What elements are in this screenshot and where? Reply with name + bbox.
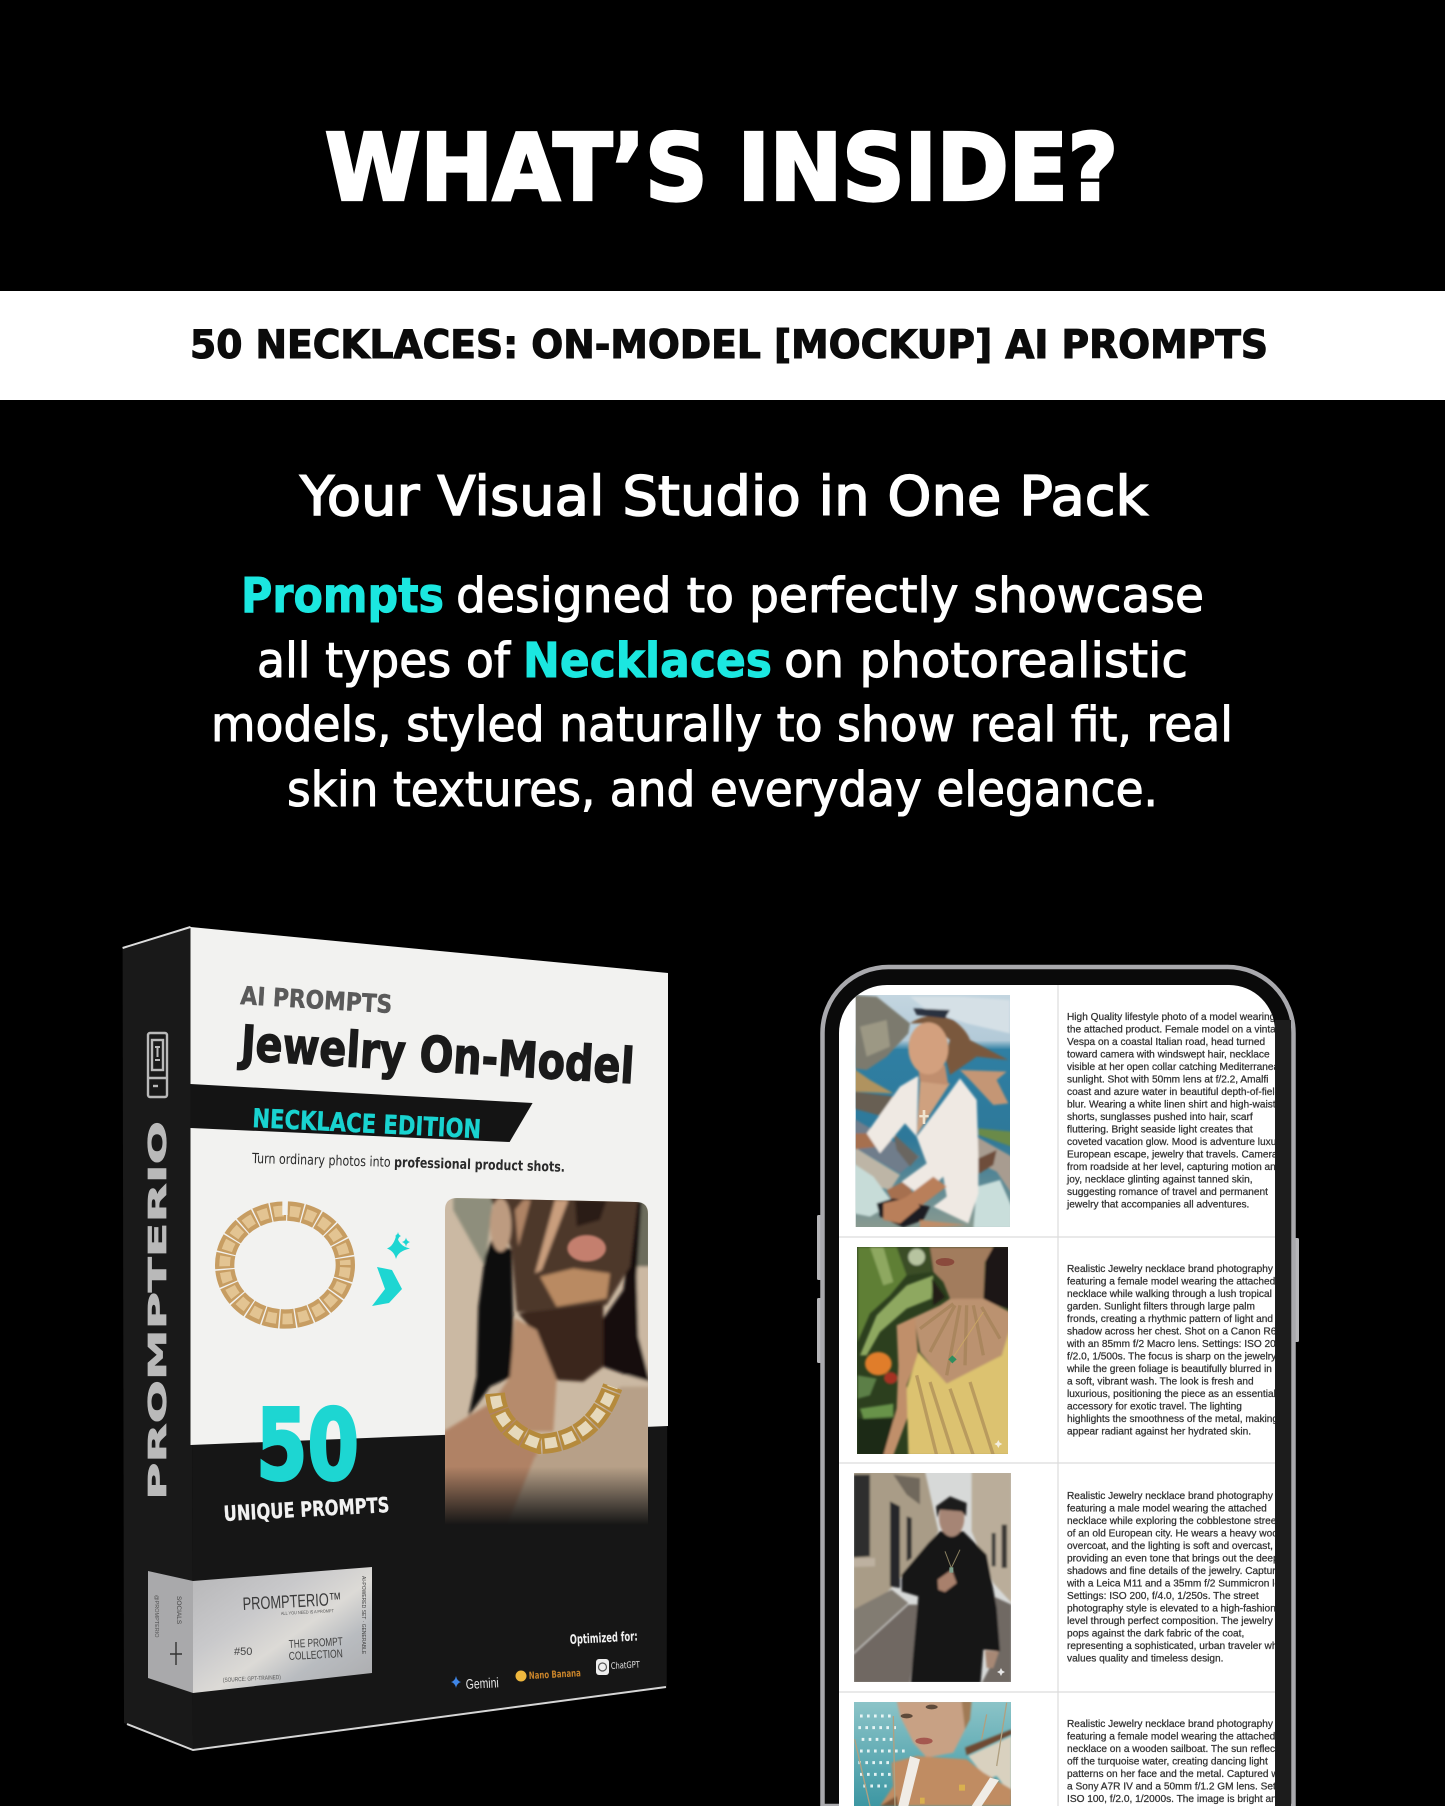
prompt text 3: Realistic Jewelry necklace brand photography xyxy=(1067,1491,1274,1502)
prompt text 1: High Quality lifestyle photo of a model wearing xyxy=(1067,1012,1275,1023)
prompt text 2: a soft, vibrant wash. The look is fresh and xyxy=(1067,1376,1254,1388)
description paragraph: Prompts xyxy=(241,568,444,624)
prompt text 2: accessory for exotic travel. The lighting xyxy=(1067,1402,1242,1412)
prompt text 3 xyxy=(1066,1491,1294,1664)
table dividers xyxy=(839,985,1275,1806)
prompt text 1: Vespa on a coastal Italian road, head turned xyxy=(1067,1037,1265,1048)
prompt text 4: ISO 100, f/2.0, 1/2000s. The image is bright and xyxy=(1067,1794,1282,1805)
nano banana badge: Nano Banana xyxy=(529,1668,581,1682)
prompt text 3: level through perfect composition. The jewelry xyxy=(1067,1616,1274,1627)
chatgpt badge: ChatGPT xyxy=(611,1660,640,1672)
phone side buttons xyxy=(817,1215,1299,1363)
necklace illustration xyxy=(225,1198,345,1319)
prompt text 3: overcoat, and the lighting is soft and overcast, xyxy=(1067,1541,1273,1552)
prompt text 4: necklace on a wooden sailboat. The sun reflects xyxy=(1067,1744,1283,1755)
phone screen xyxy=(839,985,1300,1806)
prompt text 2: fronds, creating a rhythmic pattern of light and xyxy=(1067,1314,1273,1325)
nano banana badge xyxy=(516,1668,581,1682)
prompt text 4 xyxy=(1067,1719,1275,1804)
description paragraph: on photorealistic xyxy=(784,633,1188,689)
label collection text xyxy=(289,1636,343,1663)
phone mockup xyxy=(817,967,1300,1806)
silver collection label: AI-POWERED SET · GENERABLE xyxy=(360,1576,366,1655)
product box xyxy=(123,927,668,1750)
silver collection label: (SOURCE: GPT-TRAINED) xyxy=(223,1675,281,1684)
photo: man in european street xyxy=(853,1471,1012,1683)
prompt text 2: featuring a female model wearing the attached xyxy=(1067,1276,1275,1288)
prompt text 3: representing a sophisticated, urban traveler who xyxy=(1067,1641,1283,1652)
prompt text 3: with a Leica M11 and a 35mm f/2 Summicron lens. xyxy=(1066,1578,1294,1590)
prompt text 1: toward camera with windswept hair, necklace xyxy=(1067,1050,1270,1060)
photo: model on vespa xyxy=(853,993,1012,1228)
tagline: Turn ordinary photos into professional product shots. xyxy=(251,1151,565,1176)
arrow icon xyxy=(372,1267,402,1306)
prompt text 1 xyxy=(1066,1012,1287,1210)
box front panel xyxy=(190,927,668,1750)
prompt text 2: while the green foliage is beautifully blurred in xyxy=(1066,1364,1272,1375)
count: 50: 50 xyxy=(256,1389,359,1503)
prompt text 2: f/2.0, 1/500s. The focus is sharp on the jewelry, xyxy=(1067,1352,1278,1362)
prompt text 4: a Sony A7R IV and a 50mm f/1.2 GM lens. Settings: xyxy=(1067,1782,1300,1792)
prompt text 4: featuring a female model wearing the attached xyxy=(1067,1732,1275,1742)
optimized for section xyxy=(451,1629,640,1692)
prompt text 1: coast and azure water in beautiful depth-of-field xyxy=(1067,1087,1280,1098)
silver collection label: SOCIALS xyxy=(175,1596,182,1625)
edition ribbon xyxy=(190,1084,533,1142)
edition name: NECKLACE EDITION xyxy=(252,1104,482,1145)
prompt text 1: sunlight. Shot with 50mm lens at f/2.2, Amalfi xyxy=(1067,1074,1268,1086)
prompt text 2: appear radiant against her hydrated skin. xyxy=(1067,1426,1251,1438)
label collection text: COLLECTION xyxy=(289,1648,343,1663)
prompt text 4: Realistic Jewelry necklace brand photography xyxy=(1067,1719,1274,1730)
prompt text 2: with an 85mm f/2 Macro lens. Settings: ISO 200, xyxy=(1066,1339,1284,1350)
gemini badge: Gemini xyxy=(465,1674,499,1692)
prompt text 3: necklace while exploring the cobblestone streets xyxy=(1067,1516,1284,1527)
right bezel xyxy=(1275,1020,1291,1806)
heading: your visual studio: Your Visual Studio in One Pack xyxy=(299,465,1149,528)
palm shadow stripes xyxy=(917,1304,1000,1455)
prompt text 1: shorts, sunglasses pushed into hair, scarf xyxy=(1067,1112,1253,1123)
prompt text 2: luxurious, positioning the piece as an essential xyxy=(1067,1389,1276,1400)
necklace on model xyxy=(495,1387,613,1444)
subtitle text: 50 NECKLACES: ON-MODEL [MOCKUP] AI PROMPTS xyxy=(190,323,1268,368)
label collection text: THE PROMPT xyxy=(289,1636,343,1651)
prompt text 3: values quality and timeless design. xyxy=(1067,1654,1223,1664)
phone body xyxy=(822,967,1294,1806)
silver collection label: ALL YOU NEED IS A PROMPT xyxy=(281,1608,334,1616)
model photo xyxy=(443,1197,652,1535)
prompt text 1: coveted vacation glow. Mood is adventure luxury, xyxy=(1067,1137,1287,1148)
spine brand name: PROMPTERIO xyxy=(143,1121,172,1500)
description paragraph: designed to perfectly showcase xyxy=(456,568,1204,624)
prompt text 1: fluttering. Bright seaside light creates that xyxy=(1067,1124,1253,1136)
photo: model in tropical garden xyxy=(855,1245,1010,1455)
box bottom edge xyxy=(127,1687,666,1750)
prompt text 1: the attached product. Female model on a vintage xyxy=(1067,1024,1287,1036)
product title: Jewelry On-Model xyxy=(237,1015,636,1095)
description paragraph: models, styled naturally to show real fit, real xyxy=(211,697,1233,753)
prompt text 2: necklace while walking through a lush tropical xyxy=(1067,1289,1272,1300)
description paragraph: skin textures, and everyday elegance. xyxy=(287,762,1158,818)
prompt text 4: patterns on her face and the metal. Captured with xyxy=(1067,1769,1289,1780)
water sparkles xyxy=(858,1716,907,1786)
subtitle band xyxy=(0,291,1445,400)
prompt text 1: from roadside at her level, capturing motion and xyxy=(1067,1162,1281,1173)
prompt text 2: garden. Sunlight filters through large palm xyxy=(1067,1302,1255,1312)
description paragraph xyxy=(211,568,1233,818)
description paragraph: all types of xyxy=(257,633,511,689)
prompt text 1: European escape, jewelry that travels. Camera xyxy=(1067,1150,1278,1160)
prompt text 3: shadows and fine details of the jewelry. Captured xyxy=(1067,1566,1287,1577)
box spine xyxy=(123,927,193,1750)
prompt text 3: photography style is elevated to a high-fashion xyxy=(1067,1604,1276,1614)
prompt text 3: featuring a male model wearing the attached xyxy=(1067,1504,1267,1514)
prompt text 2: Realistic Jewelry necklace brand photography xyxy=(1067,1264,1274,1275)
prompt text 4: off the turquoise water, creating dancing light xyxy=(1067,1756,1268,1768)
silver collection label: #50 xyxy=(234,1646,252,1658)
title: WHAT’S INSIDE? xyxy=(325,114,1118,222)
photo: model on sailboat xyxy=(853,1701,1012,1806)
prompt text 3: of an old European city. He wears a heavy wool xyxy=(1067,1528,1280,1540)
sparkle icon xyxy=(387,1232,410,1259)
silver collection label: @PROMPTERIO xyxy=(153,1595,159,1638)
count label: UNIQUE PROMPTS xyxy=(223,1493,390,1526)
prompt text 2 xyxy=(1066,1264,1285,1438)
prompt text 3: pops against the dark fabric of the coat, xyxy=(1067,1628,1244,1640)
gemini badge xyxy=(451,1674,499,1692)
prompt text 2: shadow across her chest. Shot on a Canon R6 II xyxy=(1067,1326,1285,1338)
description paragraph: Necklaces xyxy=(523,633,772,689)
silver collection label xyxy=(148,1567,372,1693)
prompt text 2: highlights the smoothness of the metal, making xyxy=(1067,1414,1278,1425)
label: AI prompts: AI PROMPTS xyxy=(240,981,393,1019)
prompt text 3: providing an even tone that brings out the deep xyxy=(1067,1554,1279,1564)
prompt text 1: visible at her open collar catching Mediterranean xyxy=(1067,1062,1285,1073)
prompt text 1: blur. Wearing a white linen shirt and high-waisted xyxy=(1067,1100,1287,1110)
prompt text 1: joy, necklace glinting against tanned skin, xyxy=(1066,1174,1253,1186)
white upper panel xyxy=(190,927,668,1445)
label brand: PROMPTERIO™ xyxy=(242,1589,342,1614)
prompt text 1: suggesting romance of travel and permanent xyxy=(1067,1187,1268,1198)
chatgpt badge xyxy=(596,1659,640,1675)
prompt text 1: jewelry that accompanies all adventures. xyxy=(1066,1200,1249,1210)
optimized for section: Optimized for: xyxy=(569,1629,638,1648)
prompt text 3: Settings: ISO 200, f/4.0, 1/250s. The street xyxy=(1067,1591,1259,1602)
spine logo icon xyxy=(148,1033,167,1097)
